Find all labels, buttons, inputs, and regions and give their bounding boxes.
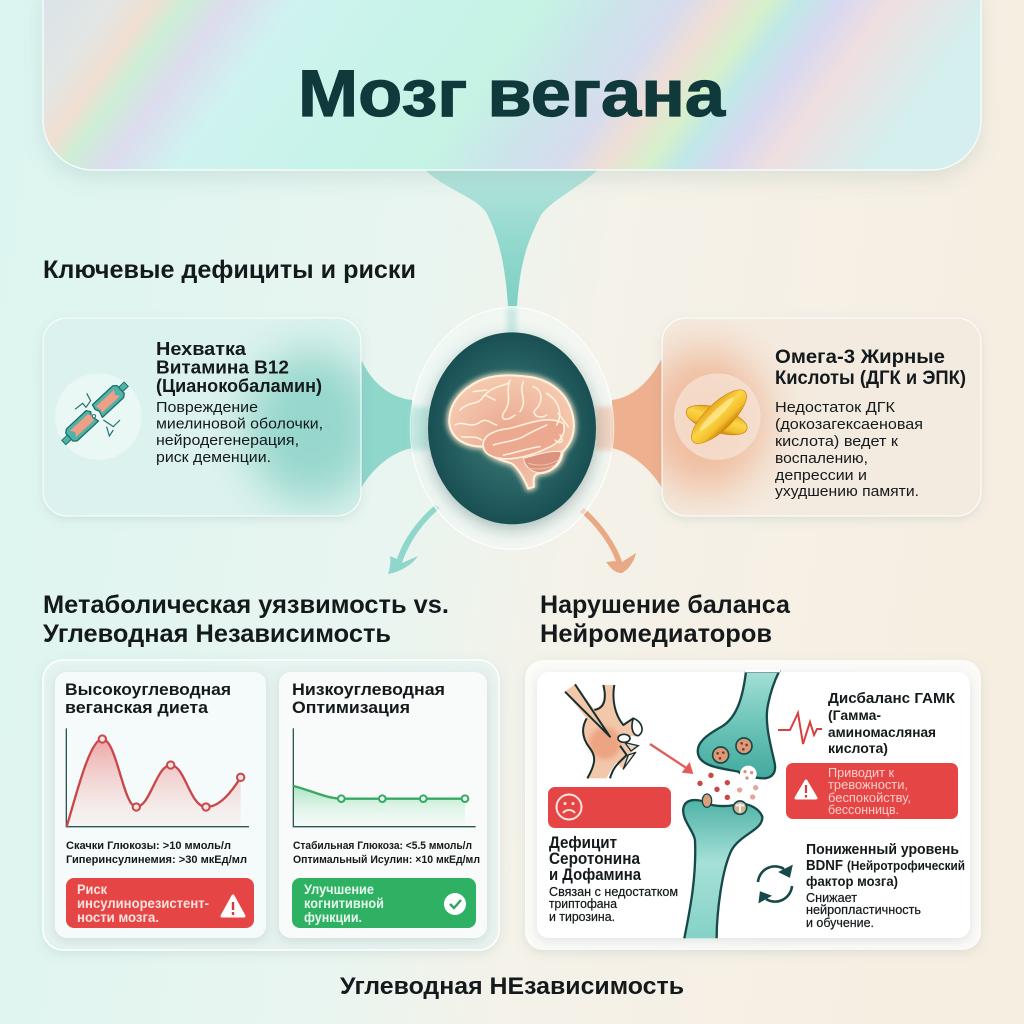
text: BDNF: и обучение. — [806, 916, 874, 930]
text: vitamin B12 heading — [156, 339, 322, 396]
text: GABA imbalance: (Гамма- — [828, 707, 881, 723]
icon: postsynaptic terminal — [683, 794, 762, 938]
heading: neurotransmitter balance — [540, 591, 791, 648]
text: BDNF: нейропластичность — [806, 903, 921, 917]
text: omega heading: Кислоты (ДГК и ЭПК) — [775, 368, 966, 389]
arrow: teal down-left — [388, 505, 440, 574]
line chart: stable glucose — [293, 728, 476, 827]
text: vitamin B12 body: миелиновой оболочки, — [156, 416, 323, 432]
icon: pulse line — [778, 713, 822, 744]
text: BDNF: Пониженный уровень — [806, 842, 959, 858]
text: serotonin and dopamine: и Дофамина — [549, 866, 642, 884]
heading: low-carb: Низкоуглеводная — [292, 680, 445, 699]
text: serotonin and dopamine: триптофана — [549, 897, 617, 911]
text: stable metrics: Оптимальный Исулин: ×10 мкЕд/мл — [293, 854, 480, 866]
panel: metabolic comparison — [43, 660, 499, 950]
text: omega body: воспалению, — [775, 450, 868, 467]
text: BDNF: BDNF — [806, 858, 843, 874]
connector: right card to brain — [612, 358, 662, 488]
connector: left card to brain — [360, 357, 412, 490]
icon: damaged myelin — [55, 373, 142, 460]
text: omega heading: Омега-3 Жирные — [775, 347, 945, 368]
card: low-carb optimisation — [279, 672, 487, 938]
text: omega body: кислота) ведет к — [775, 433, 898, 450]
text: glucose metrics: Скачки Глюкозы: >10 ммоль/л — [66, 840, 231, 852]
text: vitamin B12 heading: Витамина В12 — [156, 358, 289, 378]
text: omega body: Недостаток ДГК — [775, 399, 895, 416]
callout: brain insulin resistance — [66, 878, 254, 928]
heading: key deficits: Ключевые дефициты и риски — [43, 256, 416, 284]
callout: cognitive improvement: Улучшение — [304, 881, 374, 897]
text: GABA imbalance — [828, 691, 955, 756]
line chart: glucose spikes — [66, 728, 249, 827]
panel: omega-3 — [643, 318, 981, 516]
icon: warning — [796, 781, 816, 798]
text: BDNF: (Нейротрофический — [847, 858, 965, 873]
heading: high-carb: Высокоуглеводная — [65, 680, 231, 699]
text: vitamin B12 body — [156, 399, 323, 466]
text: serotonin and dopamine: и тирозина. — [549, 910, 615, 924]
callout: sad face bar — [548, 787, 671, 828]
heading: high-carb: веганская диета — [65, 698, 209, 717]
connector: header funnel to brain — [425, 170, 598, 306]
text: omega heading — [775, 347, 966, 389]
heading: high-carb — [65, 680, 231, 717]
heading: low-carb — [292, 680, 445, 717]
heading: metabolic vulnerability — [43, 591, 449, 648]
brain medallion — [410, 307, 614, 549]
callout: anxiety warning: беспокойству, — [828, 790, 911, 805]
heading: metabolic vulnerability: Углеводная Независимость — [43, 620, 391, 648]
text: GABA imbalance: Дисбаланс ГАМК — [828, 691, 955, 707]
icon: neuron with peach body — [565, 684, 642, 778]
text: vitamin B12 body: нейродегенерация, — [156, 432, 299, 449]
text: serotonin and dopamine: Связан с недостатком — [549, 885, 678, 899]
text: BDNF: фактор мозга) — [806, 874, 898, 889]
callout: cognitive improvement: когнитивной — [304, 895, 384, 911]
text: vitamin B12 body: риск деменции. — [156, 449, 271, 466]
heading: neurotransmitter balance: Нарушение баланса — [540, 591, 791, 619]
text: BDNF: Снижает — [806, 891, 857, 905]
text: serotonin and dopamine — [549, 834, 678, 924]
text: omega body — [775, 399, 923, 500]
icon: brain — [449, 375, 574, 489]
text: GABA imbalance: аминомасляная — [828, 724, 936, 740]
arrow: red to synapse — [650, 744, 693, 774]
callout: brain insulin resistance: Риск — [77, 881, 108, 897]
icon: neurotransmitter dots — [697, 773, 758, 800]
heading: low-carb: Оптимизация — [292, 698, 410, 717]
text: omega body: ухудшению памяти. — [775, 483, 919, 500]
text: stable metrics — [293, 840, 480, 866]
text: glucose metrics — [66, 840, 247, 866]
text: GABA imbalance: кислота) — [828, 740, 888, 756]
text: glucose metrics: Гиперинсулинемия: >30 мкЕд/мл — [66, 854, 247, 866]
text: serotonin and dopamine: Дефицит — [549, 834, 617, 852]
arrow: orange down-right — [580, 508, 636, 573]
header panel — [43, 0, 981, 170]
callout: anxiety warning — [786, 763, 958, 819]
text: serotonin and dopamine: Серотонина — [549, 850, 641, 868]
footer caption: Углеводная НЕзависимость — [340, 973, 684, 1000]
title: Мозг вегана — [298, 56, 726, 130]
heading: metabolic vulnerability: Метаболическая уязвимость vs. — [43, 591, 449, 619]
card: high-carb diet — [55, 672, 266, 938]
callout: brain insulin resistance: ности мозга. — [77, 909, 159, 925]
text: vitamin B12 heading: Нехватка — [156, 339, 247, 359]
callout: anxiety warning: Приводит к — [828, 765, 894, 780]
icon: omega capsules — [674, 373, 761, 460]
text: omega body: (докозагексаеновая — [775, 416, 923, 433]
heading: neurotransmitter balance: Нейромедиаторов — [540, 620, 772, 648]
illustration: synapse — [650, 671, 780, 938]
callout: anxiety warning: тревожности, — [828, 777, 908, 792]
callout: cognitive improvement — [292, 878, 476, 928]
icon: check — [444, 893, 466, 915]
callout: cognitive improvement: функции. — [304, 909, 362, 925]
text: stable metrics: Стабильная Глюкоза: <5.5 ммоль/л — [293, 840, 472, 852]
icon: sad face — [556, 794, 582, 820]
callout: brain insulin resistance: инсулинорезистент- — [77, 895, 209, 911]
panel: neurotransmitters — [525, 660, 981, 950]
panel: vitamin B12 — [43, 318, 378, 516]
text: vitamin B12 body: Повреждение — [156, 399, 258, 416]
callout: anxiety warning: бессонницв. — [828, 802, 899, 817]
icon: warning — [222, 896, 244, 916]
text: vitamin B12 heading: (Цианокобаламин) — [156, 376, 322, 396]
text: omega body: депрессии и — [775, 467, 867, 484]
icon: presynaptic terminal — [698, 671, 780, 782]
icon: cycle arrows — [758, 866, 792, 902]
text: BDNF — [806, 842, 965, 930]
